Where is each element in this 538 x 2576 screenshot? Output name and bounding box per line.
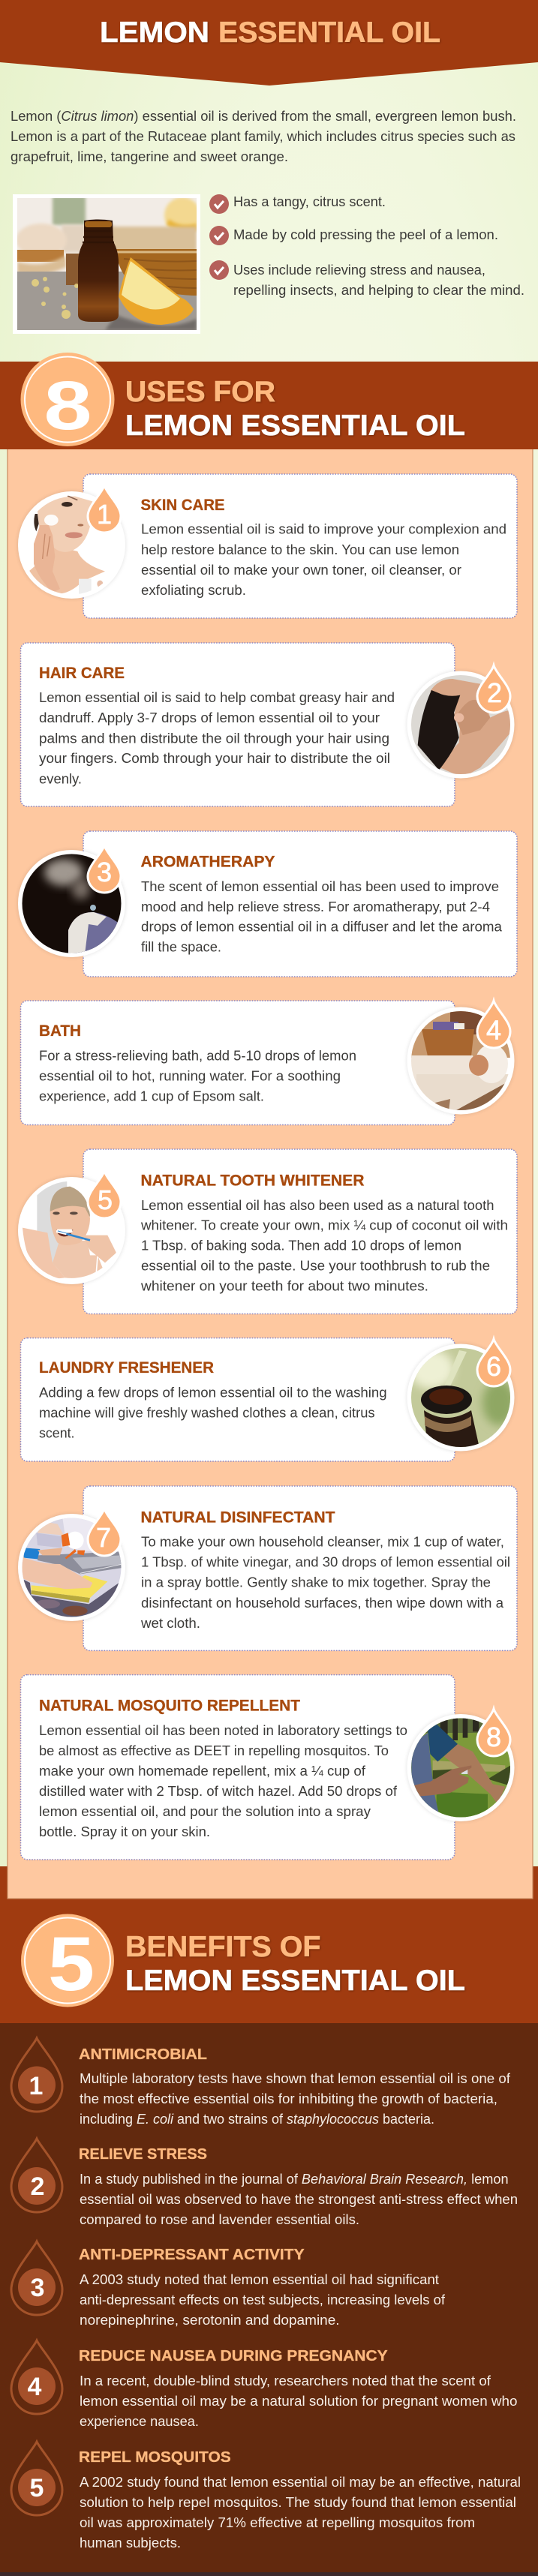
icon: drop 1: 1 xyxy=(29,2072,43,2100)
title: ESSENTIAL OIL xyxy=(218,17,440,49)
body text: oil was approximately 71% effective at repelling mosquitos from xyxy=(80,2515,475,2530)
body text: make your own homemade repellent, mix a ¼ cup of xyxy=(39,1764,366,1779)
heading text: LEMON ESSENTIAL OIL xyxy=(125,410,465,442)
body text: essential oil was observed to have the strongest anti-stress effect when xyxy=(80,2192,518,2207)
drop badge 7 xyxy=(88,1509,121,1556)
heading text: LEMON ESSENTIAL OIL xyxy=(125,1965,465,1997)
icon: drop 3 xyxy=(11,2241,62,2315)
body text: Lemon essential oil has been noted in laboratory settings to xyxy=(39,1723,407,1738)
drop badge 2: 2 xyxy=(487,677,502,708)
drop badge 6: 6 xyxy=(486,1351,501,1382)
intro paragraph: grapefruit, lime, tangerine and sweet orange. xyxy=(11,149,288,164)
benefit 3: anti-depressant activity xyxy=(11,2241,446,2328)
body text: exfoliating scrub. xyxy=(141,583,246,598)
body text xyxy=(39,1723,407,1839)
body text: Lemon essential oil is said to improve your complexion and xyxy=(141,522,506,537)
benefit 4: reduce nausea during pregnancy xyxy=(11,2340,518,2429)
bullet: uses: Uses include relieving stress and nausea, xyxy=(233,263,485,278)
body text: In a study published in the journal of Behavioral Brain Research, lemon xyxy=(80,2172,509,2187)
body text: whitener on your teeth for about two minutes. xyxy=(140,1278,428,1293)
body text: Adding a few drops of lemon essential oil to the washing xyxy=(39,1386,387,1401)
photo: brushing teeth xyxy=(17,1176,126,1286)
body text: whitener. To create your own, mix ¼ cup of coconut oil with xyxy=(140,1218,508,1233)
body text: your fingers. Comb through your hair to distribute the oil xyxy=(39,751,390,766)
panel: benefits xyxy=(0,2023,538,2572)
heading: HAIR CARE xyxy=(39,665,125,682)
heading text: BENEFITS OF xyxy=(125,1931,321,1963)
body text: 1 Tbsp. of baking soda. Then add 10 drops of lemon xyxy=(141,1238,461,1253)
heading: REPEL MOSQUITOS xyxy=(79,2448,231,2466)
body text: palms and then distribute the oil through your hair using xyxy=(39,731,389,746)
body text: lemon essential oil, and pour the solution into a spray xyxy=(39,1804,371,1819)
body text: essential oil to hot, running water. For a soothing xyxy=(39,1069,341,1084)
title xyxy=(100,17,440,49)
bullet: tangy scent: Has a tangy, citrus scent. xyxy=(233,194,386,209)
body text xyxy=(140,1198,508,1293)
body text: bottle. Spray it on your skin. xyxy=(39,1824,210,1839)
icon: drop 2 xyxy=(11,2139,62,2212)
body text: lemon essential oil may be a natural solution for pregnant women who xyxy=(80,2394,518,2409)
bullet: cold pressing xyxy=(209,226,498,245)
drop badge 5: 5 xyxy=(98,1184,113,1215)
icon: drop 5 xyxy=(11,2442,62,2515)
intro background xyxy=(0,60,538,1868)
footer strip xyxy=(0,2572,538,2576)
body text: the most effective essential oils for inhibiting the growth of bacteria, xyxy=(80,2091,497,2106)
brown background behind benefits heading xyxy=(0,1866,538,2024)
card 5: natural tooth whitener xyxy=(15,1149,517,1314)
body text: In a recent, double-blind study, researchers noted that the scent of xyxy=(80,2373,491,2388)
benefit 5: repel mosquitos xyxy=(11,2442,521,2550)
body text: solution to help repel mosquitos. The study found that lemon essential xyxy=(80,2495,516,2510)
body text: scent. xyxy=(39,1426,75,1441)
icon: drop 5: 5 xyxy=(30,2474,44,2502)
body text xyxy=(80,2475,521,2550)
body text: in a spray bottle. Gently shake to mix together. Spray the xyxy=(141,1575,491,1590)
heading: NATURAL TOOTH WHITENER xyxy=(141,1172,365,1189)
photo: cleaning with sponge xyxy=(17,1512,126,1622)
card 6: laundry freshener xyxy=(21,1338,515,1461)
title banner xyxy=(0,0,538,86)
heading text: USES FOR xyxy=(125,376,275,408)
body text: compared to rose and lavender essential oils. xyxy=(80,2212,359,2227)
icon: drop 4: 4 xyxy=(28,2373,42,2401)
drop badge 4 xyxy=(477,1001,510,1048)
icon: drop 4 xyxy=(11,2340,62,2414)
heading text xyxy=(125,376,465,442)
body text xyxy=(80,2272,446,2328)
benefit 2: relieve stress xyxy=(11,2139,518,2227)
photo: washing hair xyxy=(406,670,515,779)
body text: essential oil to make your own toner, oil cleanser, or xyxy=(141,563,461,578)
card 7: natural disinfectant xyxy=(15,1486,517,1650)
heading: NATURAL MOSQUITO REPELLENT xyxy=(39,1697,300,1715)
card 1: skin care xyxy=(15,474,517,618)
intro paragraph: Lemon is a part of the Rutaceae plant family, which includes citrus species such as xyxy=(11,129,515,144)
drop badge 5 xyxy=(88,1171,121,1218)
body text: be almost as effective as DEET in repelling mosquitos. To xyxy=(39,1743,389,1758)
heading: ANTIMICROBIAL xyxy=(79,2046,207,2063)
body text: norepinephrine, serotonin and dopamine. xyxy=(80,2313,340,2328)
body text: mood and help relieve stress. For aromatherapy, put 2-4 xyxy=(141,899,490,914)
card 2: hair care xyxy=(21,643,518,806)
drop badge 3: 3 xyxy=(97,857,112,887)
body text: help restore balance to the skin. You can use lemon xyxy=(141,542,459,557)
badge: number 8 xyxy=(21,353,114,446)
body text: dandruff. Apply 3-7 drops of lemon essential oil to your xyxy=(39,710,380,725)
heading band: 8 uses xyxy=(0,353,538,449)
card 4: bath xyxy=(21,1001,518,1125)
badge: number 5: 5 xyxy=(48,1921,95,2007)
drop badge 8 xyxy=(477,1709,510,1756)
body text: A 2003 study noted that lemon essential oil had significant xyxy=(80,2272,439,2287)
drop badge 2 xyxy=(477,665,510,713)
body text xyxy=(141,879,503,955)
body text: wet cloth. xyxy=(140,1616,200,1631)
body text: anti-depressant effects on test subjects, increasing levels of xyxy=(80,2292,446,2307)
card 3: aromatherapy xyxy=(18,831,517,977)
body text: Lemon essential oil is said to help combat greasy hair and xyxy=(39,690,395,705)
drop badge 4: 4 xyxy=(486,1014,501,1046)
body text: essential oil to the paste. Use your toothbrush to rub the xyxy=(141,1259,490,1274)
heading: NATURAL DISINFECTANT xyxy=(141,1509,335,1526)
body text xyxy=(39,1049,356,1104)
title: LEMON xyxy=(100,17,209,49)
bullet: uses xyxy=(209,260,524,298)
body text: To make your own household cleanser, mix 1 cup of water, xyxy=(141,1535,504,1550)
heading: RELIEVE STRESS xyxy=(79,2145,207,2163)
icon: drop 3: 3 xyxy=(31,2274,44,2302)
body text: distilled water with 2 Tbsp. of witch hazel. Add 50 drops of xyxy=(39,1784,398,1799)
photo: diffuser xyxy=(18,850,125,960)
body text xyxy=(80,2172,518,2227)
drop badge 1 xyxy=(88,485,121,533)
body text xyxy=(39,690,395,786)
heading: REDUCE NAUSEA DURING PREGNANCY xyxy=(79,2347,388,2364)
body text: experience, add 1 cup of Epsom salt. xyxy=(39,1089,264,1104)
body text: evenly. xyxy=(39,771,82,786)
icon: drop 1 xyxy=(11,2038,62,2112)
body text: A 2002 study found that lemon essential oil may be an effective, natural xyxy=(80,2475,521,2490)
bullet: tangy scent xyxy=(209,194,386,214)
heading: BATH xyxy=(39,1022,81,1040)
photo: woman applying cream xyxy=(17,491,126,600)
drop badge 7: 7 xyxy=(96,1522,111,1553)
panel: uses xyxy=(8,443,533,1899)
bullet: uses: repelling insects, and helping to clear the mind. xyxy=(233,283,524,298)
bullet: cold pressing: Made by cold pressing the peel of a lemon. xyxy=(233,227,498,242)
body text: drops of lemon essential oil in a diffuser and let the aroma xyxy=(141,920,503,935)
body text: disinfectant on household surfaces, then wipe down with a xyxy=(141,1596,504,1611)
body text xyxy=(140,1535,510,1631)
body text: Lemon essential oil has also been used as a natural tooth xyxy=(141,1198,494,1213)
body text: The scent of lemon essential oil has been used to improve xyxy=(141,879,499,894)
drop badge 3 xyxy=(88,845,121,893)
photo: essential oil bottle and lemon xyxy=(13,194,200,334)
body text: experience nausea. xyxy=(80,2414,199,2429)
body text: For a stress-relieving bath, add 5-10 drops of lemon xyxy=(39,1049,356,1064)
body text: 1 Tbsp. of white vinegar, and 30 drops of lemon essential oil xyxy=(141,1555,510,1570)
body text: including E. coli and two strains of staphylococcus bacteria. xyxy=(80,2112,434,2127)
heading: SKIN CARE xyxy=(141,497,225,514)
drop badge 6 xyxy=(477,1339,510,1386)
body text xyxy=(39,1386,387,1441)
photo: bath xyxy=(407,1007,518,1118)
benefit 1: antimicrobial xyxy=(11,2038,511,2127)
intro paragraph xyxy=(11,109,516,164)
drop badge 1: 1 xyxy=(97,499,112,530)
drop badge 8: 8 xyxy=(486,1722,501,1752)
body text: fill the space. xyxy=(141,940,221,955)
photo: dropper and bottle xyxy=(407,1344,515,1452)
body text xyxy=(80,2373,518,2429)
card 8: natural mosquito repellent xyxy=(21,1675,518,1860)
body text xyxy=(141,522,506,598)
body text xyxy=(80,2071,511,2127)
body text: machine will give freshly washed clothes a clean, citrus xyxy=(39,1406,375,1421)
body text: human subjects. xyxy=(80,2535,181,2550)
heading: AROMATHERAPY xyxy=(141,854,275,870)
badge: number 5 xyxy=(21,1914,114,2007)
heading: 5 benefits xyxy=(21,1914,465,2007)
badge: number 8: 8 xyxy=(44,368,92,444)
intro paragraph: Lemon (Citrus limon) essential oil is derived from the small, evergreen lemon bush. xyxy=(11,109,516,124)
heading: ANTI-DEPRESSANT ACTIVITY xyxy=(79,2246,305,2263)
photo: spraying repellent outdoors xyxy=(406,1713,515,1823)
heading: LAUNDRY FRESHENER xyxy=(39,1359,214,1377)
body text: Multiple laboratory tests have shown that lemon essential oil is one of xyxy=(80,2071,511,2086)
heading text xyxy=(125,1931,465,1997)
icon: drop 2: 2 xyxy=(31,2172,44,2201)
